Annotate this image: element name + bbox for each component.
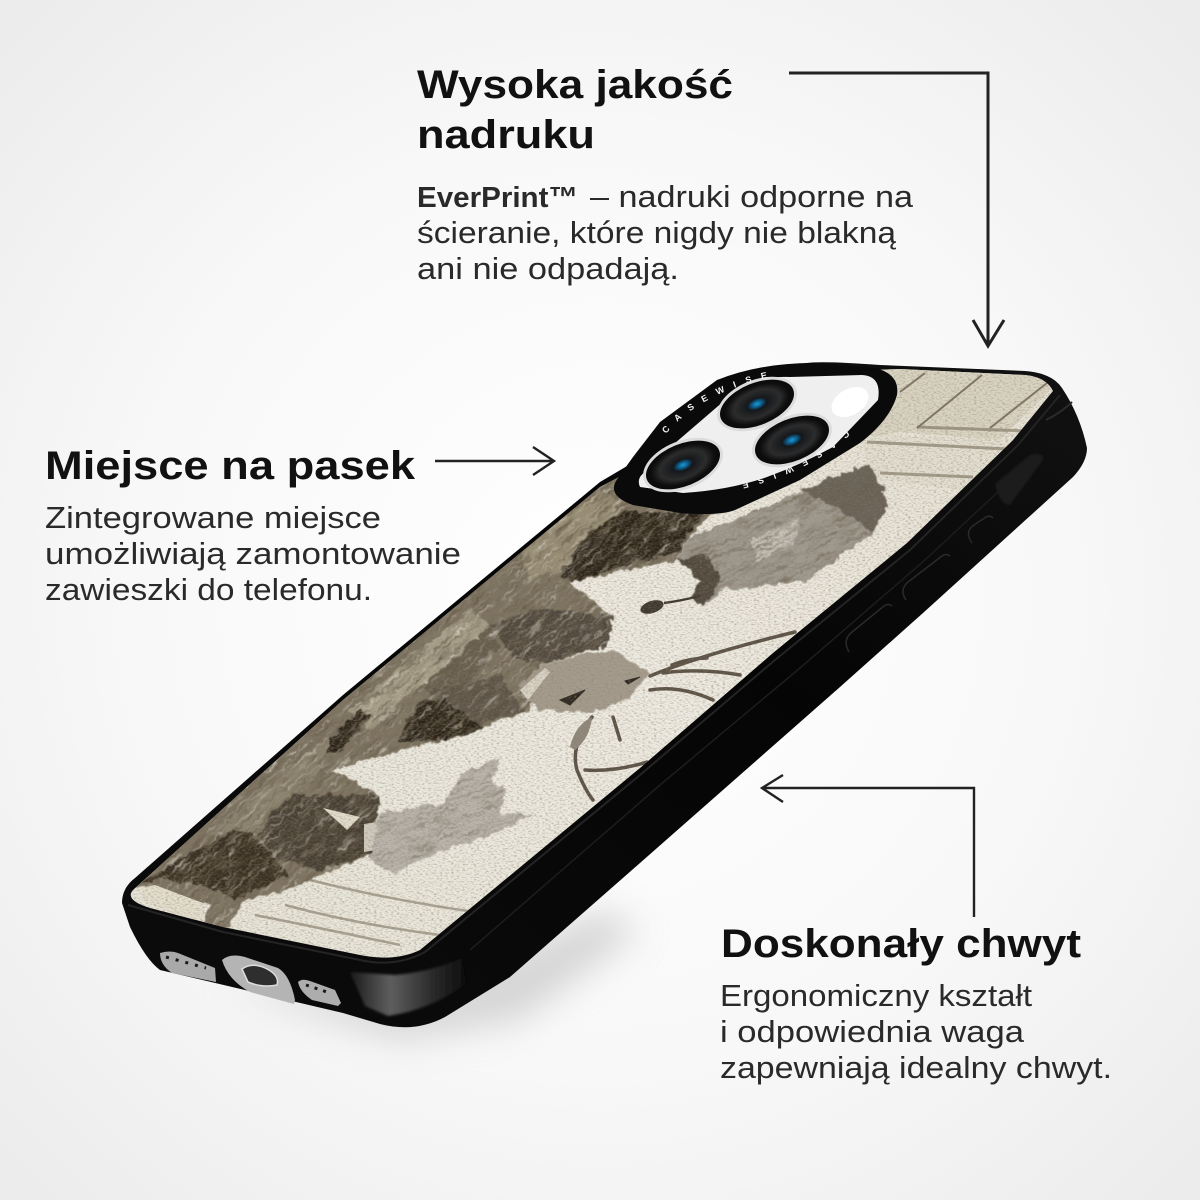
arrow: to print surface (789, 73, 1004, 346)
fox jacket (257, 795, 380, 870)
infographic canvas (46, 68, 1126, 1126)
boar head (676, 464, 889, 606)
callout: grip (720, 922, 1112, 1085)
description: umożliwiają zamontowanie (45, 536, 461, 571)
boar fur (684, 488, 884, 605)
strap bump (995, 454, 1044, 505)
callout: print quality (417, 63, 914, 286)
mute switch (968, 516, 993, 543)
lens left (635, 427, 731, 503)
camera window (639, 375, 879, 493)
antlers (575, 632, 795, 800)
description: Zintegrowane miejsce (45, 500, 381, 535)
description: ścieranie, które nigdy nie blakną (417, 215, 897, 250)
fox collar (364, 822, 377, 852)
fox head (368, 757, 533, 876)
arrow: to phone side (762, 775, 974, 917)
deer ear (570, 717, 592, 750)
side buttons (846, 516, 993, 652)
wood planks (867, 373, 1047, 477)
description: EverPrint™ (417, 182, 578, 214)
ring text guides (666, 369, 846, 494)
description: ani nie odpadają. (417, 251, 679, 286)
side groove line (470, 462, 1030, 950)
ring brand lower: CASEWISE (743, 432, 849, 488)
figures along the left edge (136, 477, 716, 928)
description: Ergonomiczny kształt (720, 978, 1032, 1013)
wood beam highlight (520, 490, 625, 580)
heading: Miejsce na pasek (45, 444, 416, 488)
heading: Wysoka jakość (417, 63, 733, 107)
coat shadow (397, 700, 485, 742)
deer head (517, 650, 650, 713)
chest streak (425, 625, 500, 690)
dark hatching (148, 481, 708, 927)
description: i odpowiednia waga (720, 1014, 1025, 1049)
paper ground (130, 369, 1053, 958)
heading: nadruku (417, 113, 595, 157)
phone shadow (220, 910, 640, 1040)
pale hatching (144, 483, 708, 928)
figure fibres (144, 481, 708, 928)
boar light cheek (750, 518, 800, 562)
cream patch (137, 885, 205, 920)
arrow: to strap slot (435, 447, 554, 475)
wood wall top right (870, 369, 1052, 440)
base figure tone (125, 470, 725, 930)
coat middle (490, 608, 613, 662)
usb opening (242, 965, 278, 986)
heading: Doskonały chwyt (721, 922, 1081, 966)
side reflection (1046, 402, 1072, 420)
floorboards (255, 880, 475, 945)
description: zapewniają idealny chwyt. (720, 1050, 1112, 1085)
deer collar (520, 668, 550, 700)
speaker holes right (306, 985, 330, 993)
camera ring (614, 363, 897, 514)
dark coat top (560, 512, 705, 582)
case lower corner highlight (350, 958, 466, 1016)
deer eye (560, 677, 640, 705)
window highlight (826, 381, 874, 423)
description (720, 978, 1112, 1085)
printed artwork (130, 369, 1053, 958)
jacket shirt (323, 808, 360, 830)
lens top (709, 366, 805, 442)
paper grain (100, 340, 1100, 980)
pale strip near edge (350, 610, 490, 730)
volume down (846, 604, 892, 652)
bottom ports (160, 952, 341, 1006)
description (45, 500, 461, 607)
coat lapel (427, 675, 525, 725)
lower dark body (140, 825, 290, 900)
phone case body (122, 362, 1087, 1027)
wood wall lower band (866, 436, 1013, 482)
left speaker (160, 952, 216, 982)
callout: strap slot (45, 444, 461, 607)
right speaker (298, 980, 341, 1006)
heading (417, 63, 733, 157)
boar mane (800, 463, 888, 533)
description (417, 179, 914, 286)
speaker holes left (166, 957, 206, 968)
ring brand upper: CASEWISE (662, 372, 767, 432)
twig (639, 596, 700, 616)
screen rim line (128, 395, 1060, 963)
dark streak (326, 708, 372, 754)
usb port (222, 956, 295, 1004)
volume up (903, 554, 950, 600)
lens right (744, 402, 840, 478)
description: zawieszki do telefonu. (45, 572, 372, 607)
lower mid strip (210, 735, 330, 835)
phone illustration (122, 362, 1087, 1050)
description: – nadruki odporne na (590, 179, 914, 214)
camera module (614, 363, 898, 514)
boar snout shade (677, 553, 722, 607)
fox fur (368, 760, 525, 869)
